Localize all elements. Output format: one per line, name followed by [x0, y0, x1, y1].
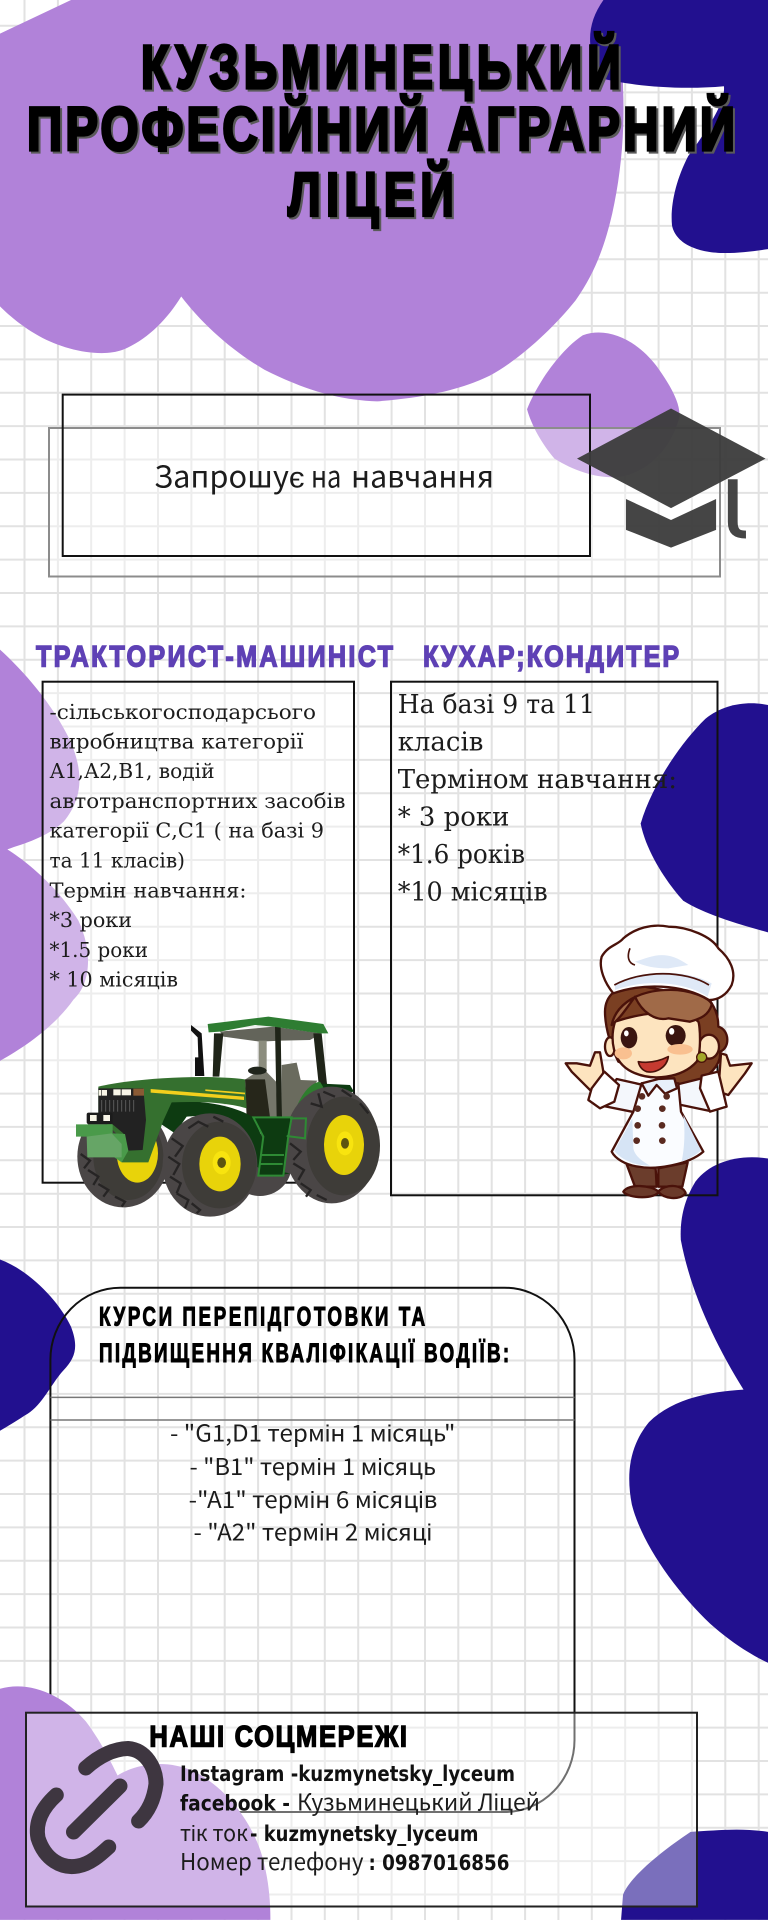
blob: large purple top	[0, 0, 624, 401]
illustration: chef girl	[566, 926, 752, 1198]
panel: retraining courses: - "A2" термін 2 місяці	[194, 1514, 432, 1548]
blob: purple left middle	[0, 650, 88, 1061]
blob: small purple near cap	[527, 333, 679, 477]
blob: dark blue right upper	[641, 703, 768, 932]
panel: tractor driver details: *3 роки	[50, 908, 132, 932]
contact lines: Instagram -kuzmynetsky_lyceum	[180, 1762, 515, 1786]
panel: retraining courses: КУРСИ ПЕРЕПІДГОТОВКИ ТА	[99, 1301, 425, 1331]
blob: dark blue top right	[590, 0, 768, 253]
blob: dark blue right large	[629, 1240, 768, 1663]
invitation text: навчання	[351, 452, 494, 496]
panel: tractor driver details: та 11 класів)	[50, 848, 185, 872]
panel: cook details: *1.6 років	[398, 840, 525, 870]
blob: purple bottom left	[0, 1686, 270, 1920]
invitation text	[154, 452, 494, 496]
panel: retraining courses: ПІДВИЩЕННЯ КВАЛІФІКАЦІЇ ВОДІЇВ:	[99, 1338, 509, 1368]
heading: cook: КУХАР;КОНДИТЕР	[423, 640, 679, 673]
title: ПРОФЕСІЙНИЙ АГРАРНИЙ	[27, 94, 735, 163]
heading: socials: НАШІ СОЦМЕРЕЖІ	[149, 1720, 407, 1753]
panel: tractor driver details: * 10 місяців	[50, 968, 178, 992]
panel: invitation inner frame	[63, 395, 590, 556]
panel: tractor driver details: А1,А2,В1, водій	[50, 759, 214, 783]
panel: retraining courses	[50, 1288, 574, 1812]
contact lines: facebook -	[180, 1792, 290, 1816]
panel: tractor driver details: *1.5 роки	[50, 938, 148, 962]
panel: cook details: класів	[398, 728, 483, 758]
contact lines: - kuzmynetsky_lyceum	[250, 1822, 478, 1846]
panel: tractor driver details: виробництва категорії	[50, 730, 304, 754]
illustration: tractor	[76, 1017, 380, 1217]
contact lines: Кузьминецький Ліцей	[297, 1784, 540, 1818]
panel: tractor driver details: автотранспортних засобів	[50, 789, 346, 813]
panel: invitation outer frame	[49, 428, 720, 576]
icon: graduation cap	[577, 408, 766, 548]
panel: tractor driver details: -сільськогосподарсього	[50, 700, 316, 724]
blob: dark blue bottom right	[621, 1830, 768, 1920]
title: ЛІЦЕЙ	[288, 160, 454, 229]
panel: cook details: На базі 9 та 11	[398, 690, 595, 720]
contact lines: Номер телефону	[180, 1843, 364, 1877]
heading: tractor driver: ТРАКТОРИСТ-МАШИНІСТ	[36, 640, 393, 673]
panel: cook details: *10 місяців	[398, 878, 548, 908]
panel: tractor driver details: категорії С,С1 ( на базі 9	[50, 818, 324, 842]
panel: retraining courses: - "G1,D1 термін 1 місяць"	[170, 1415, 456, 1449]
panel: cook details	[391, 682, 718, 1195]
panel: tractor driver details	[43, 682, 354, 1183]
panel: retraining courses: -"A1" термін 6 місяців	[189, 1481, 437, 1515]
panel: tractor driver details: Термін навчання:	[50, 879, 246, 903]
title	[27, 33, 735, 229]
invitation text: на	[311, 452, 341, 496]
panel: retraining courses: - "B1" термін 1 місяць	[190, 1448, 436, 1482]
blob: dark blue left	[0, 1260, 75, 1431]
title: КУЗЬМИНЕЦЬКИЙ	[141, 33, 621, 101]
panel: cook details: Терміном навчання:	[398, 765, 677, 795]
panel: social media	[26, 1713, 697, 1906]
contact lines	[180, 1762, 540, 1877]
invitation text: Запрошує	[154, 452, 305, 496]
icon: link	[37, 1748, 156, 1867]
panel: cook details: * 3 роки	[398, 803, 509, 833]
contact lines: : 0987016856	[368, 1851, 510, 1875]
blob: dark blue right lower start	[681, 1157, 768, 1240]
contact lines: тік ток	[180, 1816, 248, 1848]
